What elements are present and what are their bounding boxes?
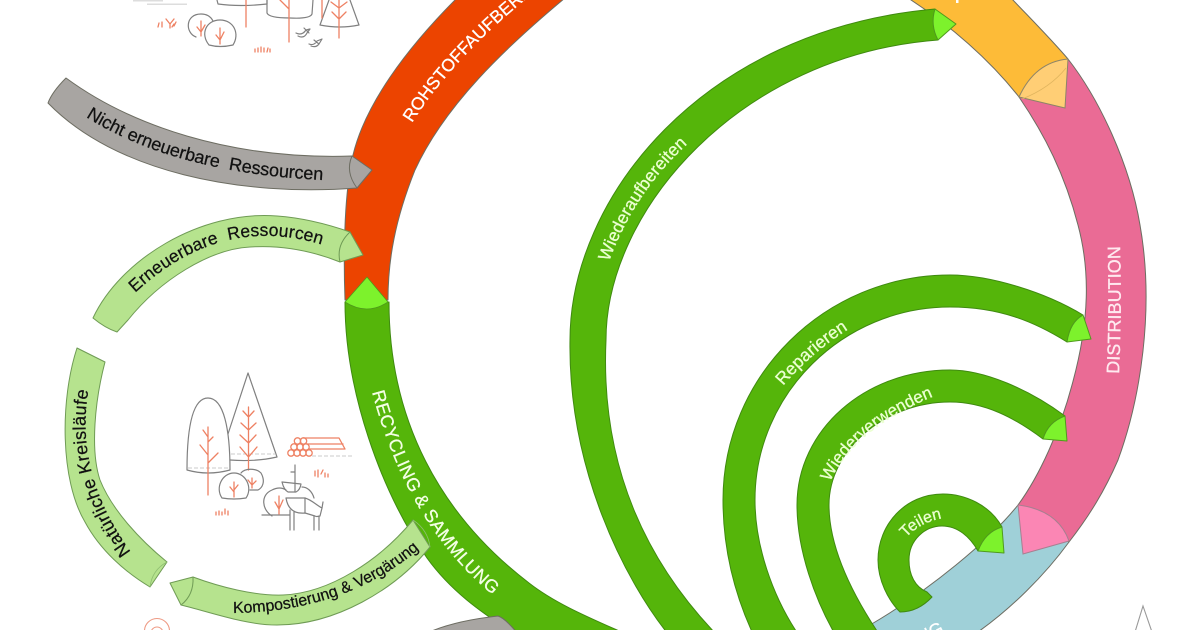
icon: conical tree	[228, 373, 277, 470]
arrow: grey input bottom	[425, 616, 518, 630]
icon: bushes	[219, 469, 263, 499]
arrowhead: Reparieren	[1067, 315, 1091, 342]
arrowhead: Produktion to Distribution	[1019, 59, 1068, 108]
label: Kompostierung und Vergaerung: Kompostierung & Vergärung	[234, 542, 420, 615]
icon: tree tip bottom right	[1135, 606, 1152, 630]
arrow: Nicht erneuerbare Ressourcen	[48, 78, 372, 190]
arrow: Erneuerbare Ressourcen	[92, 215, 364, 332]
illustration: forest with deer and logs	[187, 373, 352, 530]
band: Recycling und Sammlung	[344, 302, 618, 630]
arrowhead: Wiederaufbereiten	[933, 9, 956, 40]
arrowhead: Recycling to Rohstoffaufbereitung	[345, 277, 388, 309]
label: Distribution: DISTRIBUTION	[1106, 247, 1122, 373]
arc: Teilen	[878, 494, 1004, 612]
arrowhead: Kompostierung und Vergaerung	[170, 577, 193, 605]
icon: deer	[262, 465, 323, 530]
arrowhead: Wiederverwenden	[1043, 416, 1067, 441]
arc: Reparieren	[722, 274, 1092, 630]
label: Natuerliche Kreislaeufe: Natürliche Kreisläufe	[72, 390, 130, 558]
label: Teilen: Teilen	[898, 510, 941, 536]
arrow: Natuerliche Kreislaeufe	[64, 348, 168, 588]
band: Rohstoffaufbereitung	[344, 0, 564, 300]
arrowhead: Erneuerbare Ressourcen	[339, 232, 363, 262]
label: Nicht erneuerbare Ressourcen: Nicht erneuerbare Ressourcen	[87, 107, 322, 180]
label: Wiederverwenden: Wiederverwenden	[819, 389, 932, 479]
label: Reparieren: Reparieren	[774, 323, 848, 385]
illustration: forest top	[133, 0, 359, 52]
band: Produktion	[908, 0, 1068, 97]
label: Wiederaufbereiten: Wiederaufbereiten	[598, 138, 687, 259]
arc: Wiederverwenden	[796, 370, 1068, 630]
icon: spiral bottom left	[144, 618, 170, 630]
icon: grass	[216, 470, 328, 515]
icon: tall round tree	[187, 398, 230, 495]
label: Recycling und Sammlung: RECYCLING & SAMMLUNG	[372, 390, 498, 593]
label: Erneuerbare Ressourcen: Erneuerbare Ressourcen	[128, 226, 323, 292]
arc: Wiederaufbereiten	[569, 8, 956, 630]
band: Nutzung	[872, 505, 1070, 630]
arrowhead: Nicht erneuerbare Ressourcen	[349, 156, 372, 188]
arrow: Kompostierung und Vergaerung	[170, 520, 430, 626]
icon: log pile	[288, 438, 352, 456]
band: Distribution	[1018, 59, 1147, 542]
arrowhead: Distribution to Nutzung	[1018, 505, 1069, 554]
arrowhead: Teilen	[978, 527, 1004, 553]
